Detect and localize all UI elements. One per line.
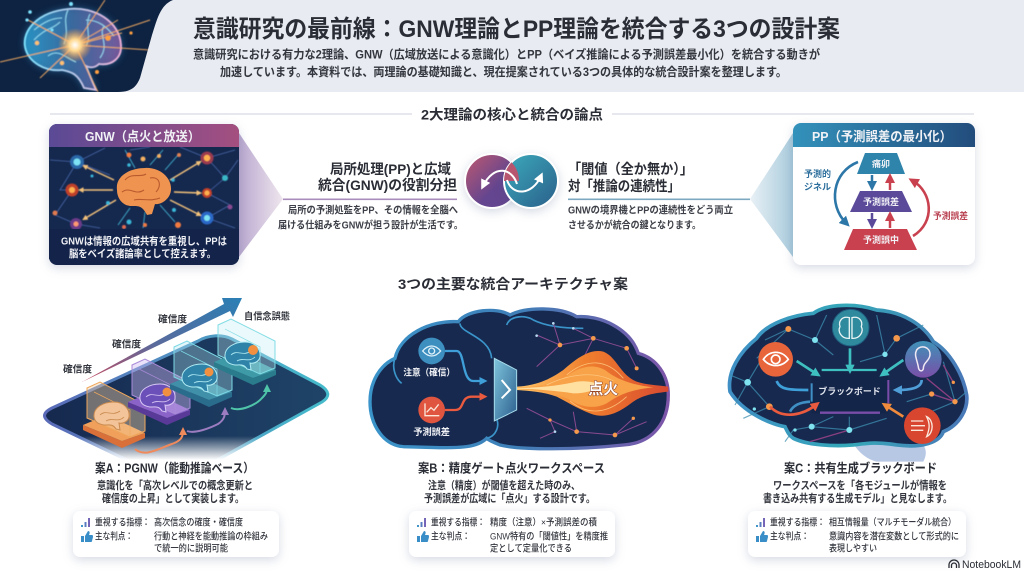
stage 3 teal — [170, 341, 232, 407]
header image: glowing brain — [0, 0, 175, 92]
prediction error input: 予測誤差 — [413, 426, 450, 437]
label: prediction signal: ジネル — [804, 182, 831, 192]
predictive hierarchy pyramid: 痛卯 — [872, 158, 890, 169]
proposal C metrics card: 重視する指標： — [770, 516, 825, 528]
icon: thumbs up — [81, 531, 93, 542]
proposal C text: 書き込み共有する生成モデル」と見なします。 — [763, 491, 952, 505]
PP heading: PP（予測誤差の最小化） — [812, 129, 952, 144]
brain stem — [853, 443, 926, 462]
illustration C: shared blackboard brain — [729, 305, 967, 462]
module arrows — [770, 348, 922, 417]
predictive hierarchy pyramid — [844, 153, 917, 250]
PP heading — [793, 123, 975, 147]
funnel right — [750, 133, 793, 257]
illustration B: gated ignition cloud — [370, 309, 668, 449]
GNW caption: GNWは情報の広域共有を重視し、PPは — [61, 234, 227, 248]
stage labels: 自信念誤態 — [244, 310, 290, 322]
blackboard: ブラックボード — [818, 385, 881, 396]
panel: GNW — [49, 124, 239, 265]
center right statement: 対「推論の連続性」 — [568, 178, 680, 194]
stage 1 orange — [83, 382, 145, 448]
proposal C metrics card: 意識内容を潜在変数として形式的に — [829, 530, 959, 542]
funnel left — [239, 133, 283, 257]
icon: bars — [81, 518, 90, 527]
center left statement — [278, 161, 463, 232]
center left statement: 局所処理(PP)と広域 — [330, 161, 451, 177]
proposal A text: 確信度の上昇」として実装します。 — [102, 491, 244, 505]
center right statement: GNWの境界機とPPの連続性をどう両立 — [568, 204, 733, 216]
prediction error input — [413, 397, 484, 437]
GNW caption: 脳をベイズ諸論率として控えます。 — [69, 247, 216, 260]
icon: eye module — [758, 342, 793, 377]
subtitle: 加速しています。本資料では、両理論の基礎知識と、現在提案されている3つの具体的な統合設計案を整理します。 — [220, 64, 787, 79]
cloud outline — [370, 309, 668, 449]
proposal A text: 意識化を「高次レベルでの概念更新と — [97, 478, 253, 492]
stage labels: 確信度 — [63, 364, 92, 376]
gate — [494, 358, 517, 421]
proposal B metrics card: 重視する指標： — [431, 516, 485, 528]
proposal B text: 注意（精度）が閾値を超えた時のみ、 — [428, 478, 580, 492]
proposal C text: ワークスペースを「各モジュールが情報を — [773, 478, 947, 492]
GNW heading: GNW（点火と放送） — [85, 129, 200, 144]
proposal C metrics card: 相互情報量（マルチモーダル統合） — [829, 516, 956, 528]
icon: interlocking circles — [465, 154, 558, 208]
label: prediction signal — [804, 168, 831, 192]
proposal B text: 予測誤差が広域に「点火」する設計です。 — [424, 491, 595, 505]
stage labels — [63, 310, 290, 376]
proposal A metrics card: 行動と神経を能動推論の枠組み — [154, 530, 268, 542]
center right statement — [568, 161, 750, 232]
label: prediction error: 予測誤差 — [933, 210, 968, 221]
icon: sound module — [904, 407, 941, 444]
attention input — [403, 338, 484, 381]
icon: bars — [417, 518, 426, 527]
subtitle: 意識研究における有力な2理論、GNW（広域放送による意識化）とPP（ベイズ推論による予測誤差最小化）を統合する動きが — [193, 46, 820, 62]
ignition flame — [517, 351, 668, 416]
GNW caption — [49, 229, 239, 260]
proposal A metrics card: 高次信念の確度・確信度 — [154, 516, 243, 528]
GNW central brain — [117, 168, 171, 215]
proposal C text: 案C：共有生成ブラックボード — [784, 460, 937, 476]
proposal A text — [95, 460, 254, 505]
stage labels: 確信度 — [112, 338, 141, 350]
proposal C metrics card: 表現しやすい — [829, 542, 877, 554]
proposal B metrics card: GNW特有の「閾値性」を精度推 — [490, 530, 608, 542]
center right statement: 「閾値（全か無か）」 — [568, 161, 693, 177]
center left statement: 統合(GNW)の役割分担 — [318, 177, 457, 193]
stage 2 purple — [128, 359, 190, 425]
icon: thumbs up — [417, 531, 429, 542]
illustration A: hierarchy platform — [30, 298, 340, 480]
center right statement: させるかが統合の鍵となります。 — [568, 218, 701, 232]
label: prediction signal: 予測的 — [804, 168, 831, 179]
center left statement: 局所の予測処監をPP、その情報を全腦へ — [288, 204, 458, 216]
proposal A metrics card — [73, 511, 279, 557]
proposal A metrics card: 主な判点： — [95, 530, 133, 542]
GNW heading — [49, 124, 239, 147]
proposal B metrics card: 精度（注意）×予測誤差の積 — [490, 516, 597, 528]
proposal A metrics card: で統一的に説明可能 — [154, 542, 228, 554]
stage arrows — [135, 388, 267, 453]
panel: PP — [793, 123, 975, 265]
neural network — [730, 315, 967, 442]
predictive hierarchy pyramid: 予測誤中 — [863, 234, 899, 245]
proposal B metrics card: 主な判点： — [431, 530, 470, 542]
proposal B text: 案B：精度ゲート点火ワークスペース — [418, 460, 605, 476]
proposal B text — [418, 460, 605, 505]
proposal B metrics card — [409, 511, 615, 557]
blackboard — [812, 370, 888, 413]
proposal B metrics card: 定として定量化できる — [490, 544, 572, 554]
rising arrow — [82, 298, 242, 382]
proposal C metrics card — [748, 511, 966, 557]
icon: thumbs up — [756, 531, 768, 542]
stage labels: 確信度 — [158, 314, 187, 326]
attention input: 注意（確信） — [403, 366, 455, 377]
section heading: architectures: 3つの主要な統合アーキテクチャ案 — [398, 276, 628, 292]
subtitle — [193, 46, 820, 79]
ignition network — [394, 317, 647, 438]
title: 意識研究の最前線：GNW理論とPP理論を統合する3つの設計案 — [193, 16, 840, 43]
proposal A text: 案A：PGNW（能動推論ベース） — [95, 460, 254, 476]
GNW network illustration — [49, 147, 239, 230]
ignition label: 点火 — [588, 380, 618, 398]
center left statement: 届ける仕組みをGNWが担う設計が生活です。 — [278, 218, 463, 232]
icon: brain module — [832, 309, 869, 346]
platform — [30, 336, 340, 480]
NotebookLM logo: NotebookLM — [962, 559, 1021, 571]
proposal C text — [763, 460, 952, 505]
icon: bars — [756, 518, 765, 527]
proposal C metrics card: 主な判点： — [770, 530, 809, 542]
predictive hierarchy pyramid: 予測誤差 — [863, 196, 899, 207]
proposal A metrics card: 重視する指標： — [95, 516, 150, 528]
section heading: theories: 2大理論の核心と統合の論点 — [421, 106, 603, 122]
header band — [0, 0, 1024, 92]
brain outline — [729, 305, 967, 446]
arrow: prediction signal — [835, 162, 858, 223]
stage 4 cyan — [214, 319, 276, 385]
arrow: prediction error — [913, 181, 929, 236]
icon: ear module — [905, 341, 942, 378]
